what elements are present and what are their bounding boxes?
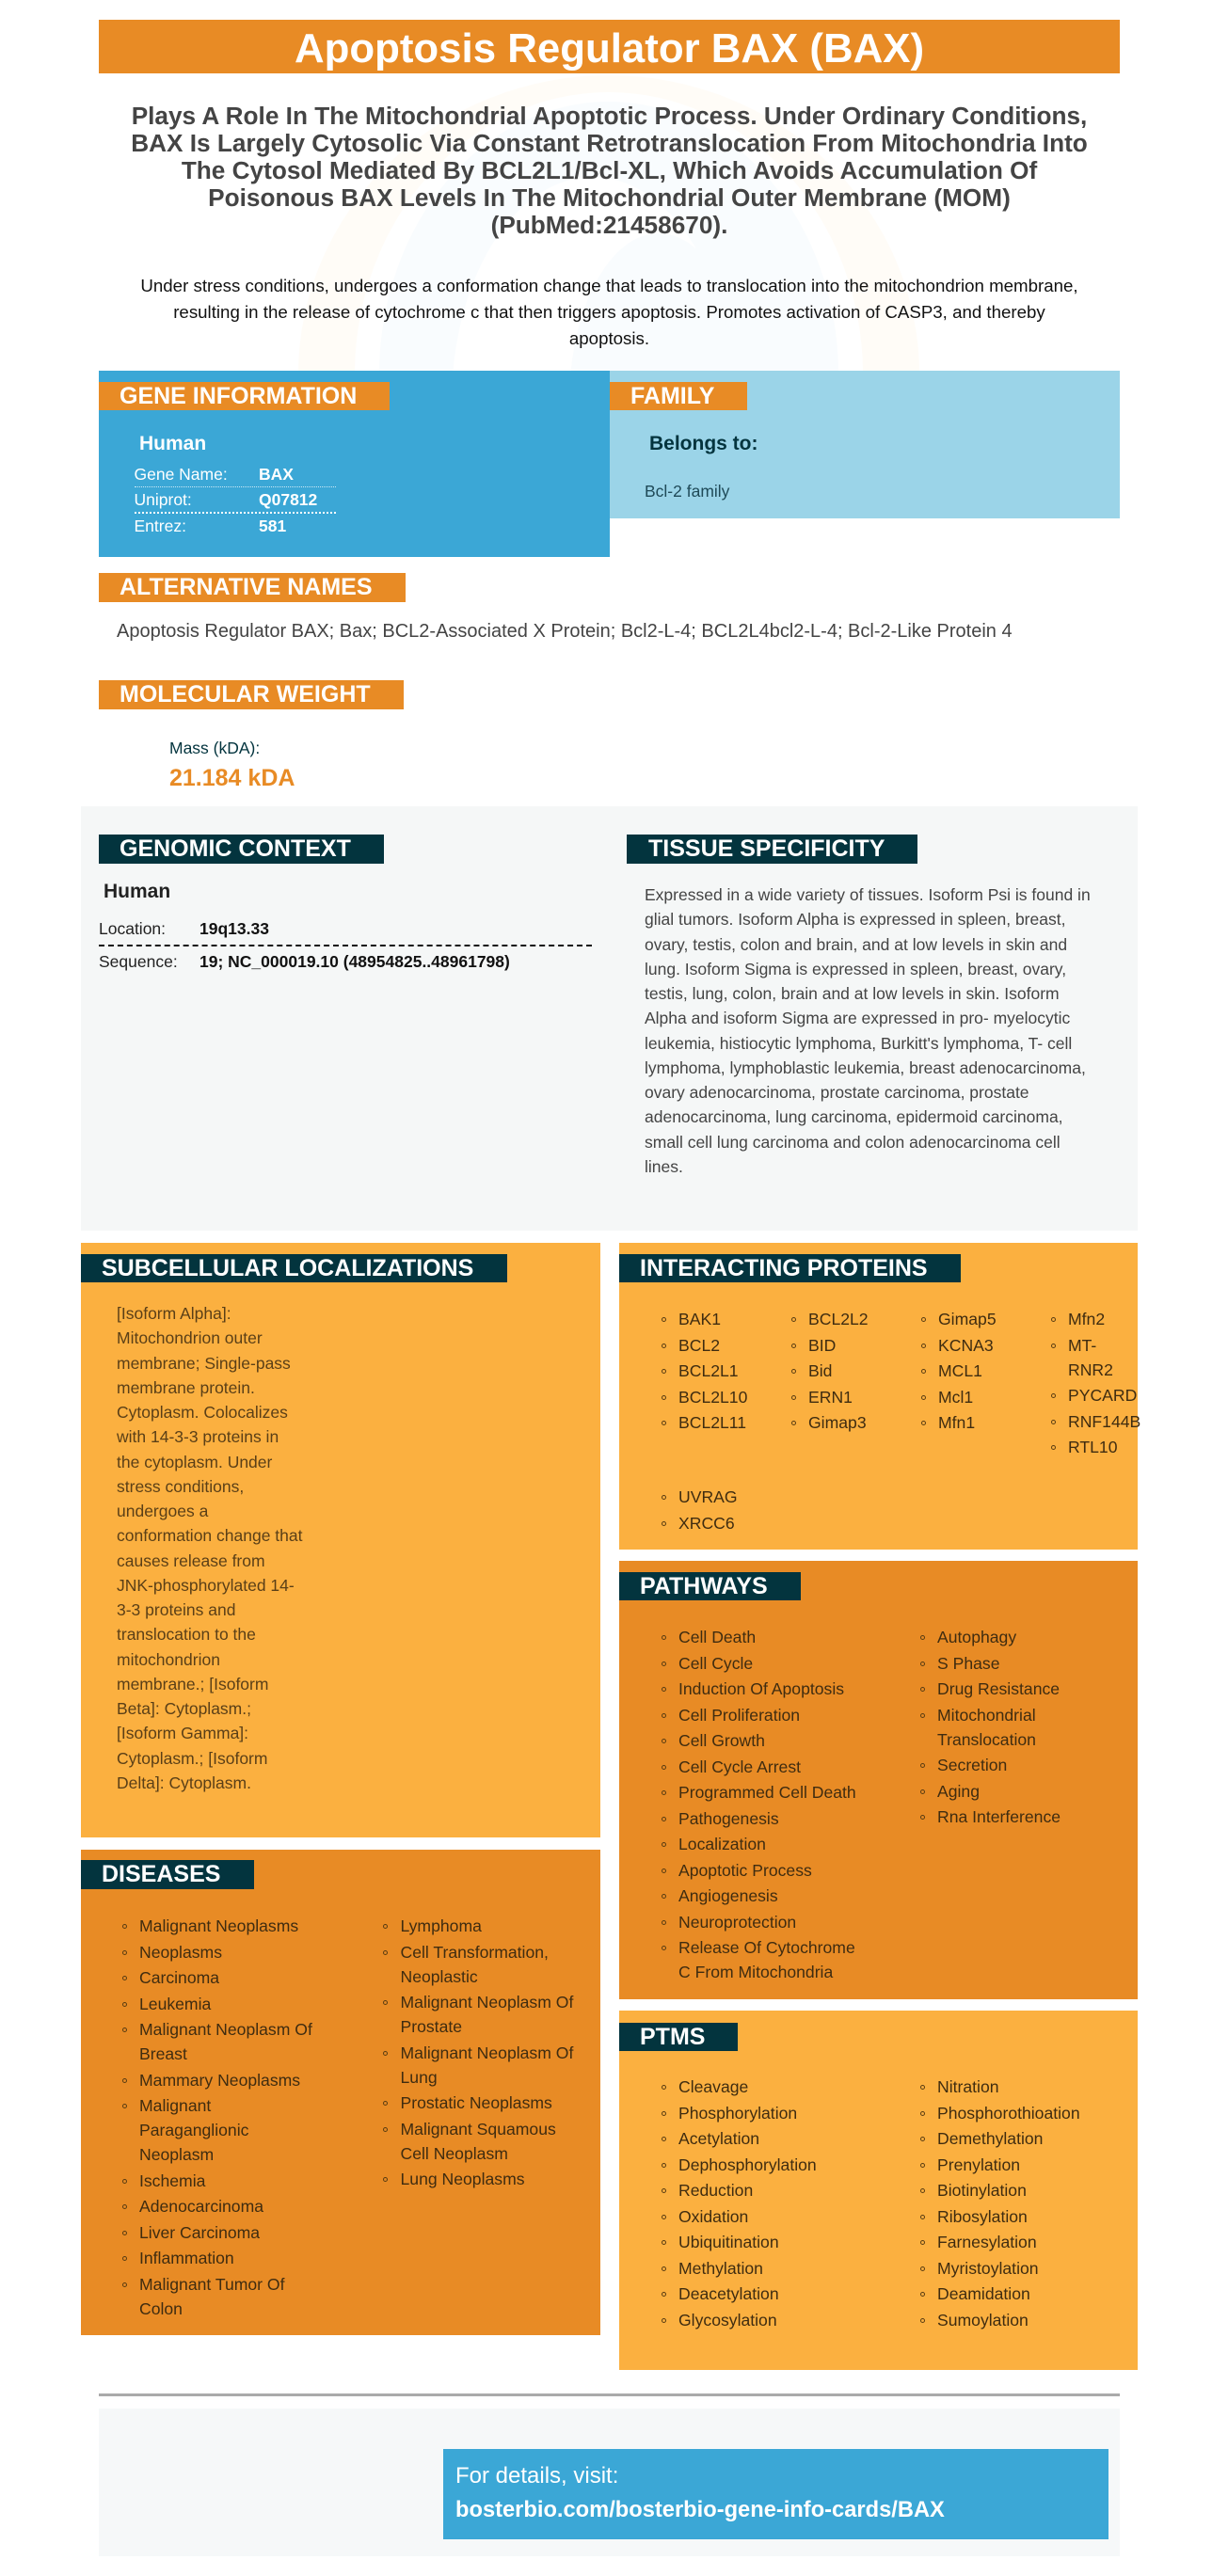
diseases list column 1: Malignant Neoplasms xyxy=(139,1916,298,1935)
heading: subcellular localizations: SUBCELLULAR LOCALIZATIONS xyxy=(102,1255,473,1281)
description xyxy=(140,276,1078,348)
diseases list column 1: Inflammation xyxy=(139,2249,234,2267)
interacting proteins column 4: Mfn2 xyxy=(1068,1310,1105,1328)
tissue specificity text: small cell lung carcinoma and colon adenocarcinoma cell xyxy=(645,1133,1060,1152)
ptms list column 1: Methylation xyxy=(678,2258,763,2277)
diseases list column 2: Prostate xyxy=(401,2017,462,2036)
callout: details link xyxy=(443,2449,1108,2539)
gene info table xyxy=(134,465,336,535)
pathways list column 1: Release Of Cytochrome xyxy=(678,1938,855,1957)
pathways list column 2: Rna Interference xyxy=(937,1807,1060,1826)
subcellular localizations text: the cytoplasm. Under xyxy=(117,1453,272,1471)
mass value: 21.184 kDA xyxy=(169,765,295,791)
alternative names text: Apoptosis Regulator BAX; Bax; BCL2-Associated X Protein; Bcl2-L-4; BCL2L4bcl2-L-4; Bcl-2-Like Protein 4 xyxy=(117,621,1013,642)
pathways list column 1: Apoptotic Process xyxy=(678,1861,812,1880)
details url: bosterbio.com/bosterbio-gene-info-cards/BAX xyxy=(455,2498,945,2522)
interacting proteins column 2: Bid xyxy=(808,1361,832,1380)
ptms list column 2: Sumoylation xyxy=(937,2311,1029,2330)
subcellular localizations text xyxy=(117,1304,303,1792)
gene info table: BAX xyxy=(259,465,294,484)
heading: molecular weight: MOLECULAR WEIGHT xyxy=(120,681,371,708)
pathways list column 1: Cell Growth xyxy=(678,1731,765,1750)
pathways list column 2: Secretion xyxy=(937,1756,1007,1774)
ptms list column 1: Phosphorylation xyxy=(678,2104,797,2123)
subcellular localizations text: stress conditions, xyxy=(117,1477,244,1496)
interacting proteins column 1: BCL2L10 xyxy=(678,1387,747,1406)
subcellular localizations text: with 14-3-3 proteins in xyxy=(117,1427,279,1446)
subtitle: Plays A Role In The Mitochondrial Apoptotic Process. Under Ordinary Conditions, xyxy=(132,102,1087,130)
heading: ptms: PTMS xyxy=(640,2024,705,2050)
diseases list column 2: Malignant Neoplasm Of xyxy=(401,2043,573,2062)
heading: gene information: GENE INFORMATION xyxy=(120,383,357,409)
tissue specificity text: adenocarcinoma, lung carcinoma, epidermoid carcinoma, xyxy=(645,1107,1063,1126)
subcellular localizations text: causes release from xyxy=(117,1550,265,1569)
diseases list column 1: Carcinoma xyxy=(139,1968,219,1987)
heading: diseases: DISEASES xyxy=(102,1861,220,1887)
pathways list column 1: Pathogenesis xyxy=(678,1808,779,1827)
interacting proteins column 1: BCL2 xyxy=(678,1336,720,1355)
gene info table: 581 xyxy=(259,517,286,535)
description: resulting in the release of cytochrome c that then triggers apoptosis. Promotes activation of CASP3, and thereby xyxy=(173,302,1045,322)
interacting proteins column 2: BID xyxy=(808,1336,836,1355)
interacting proteins column 3: Mcl1 xyxy=(938,1387,973,1406)
diseases list column 1: Breast xyxy=(139,2044,187,2063)
diseases list column 1: Ischemia xyxy=(139,2171,205,2190)
genomic table xyxy=(99,919,592,971)
subcellular localizations text: undergoes a xyxy=(117,1502,208,1520)
subtitle: BAX Is Largely Cytosolic Via Constant Retrotranslocation From Mitochondria Into xyxy=(131,128,1088,156)
ptms list column 2: Deamidation xyxy=(937,2284,1030,2303)
diseases list column 1: Neoplasm xyxy=(139,2145,214,2164)
subcellular localizations text: Cytoplasm.; [Isoform xyxy=(117,1748,267,1767)
pathways list column 1: Neuroprotection xyxy=(678,1912,796,1931)
tissue specificity text: ovary adenocarcinoma, prostate carcinoma, prostate xyxy=(645,1083,1029,1102)
heading: interacting proteins: INTERACTING PROTEINS xyxy=(640,1255,928,1281)
gene info table: Uniprot: xyxy=(134,490,192,509)
interacting proteins column 3: Gimap5 xyxy=(938,1310,997,1328)
panel: gene information xyxy=(99,371,610,557)
diseases list column 1: Malignant xyxy=(139,2096,211,2115)
gene info table: Gene Name: xyxy=(134,465,228,484)
ptms list column 2: Nitration xyxy=(937,2077,999,2096)
tissue specificity text: lymphoma, lymphoblastic leukemia, breast adenocarcinoma, xyxy=(645,1058,1086,1077)
interacting proteins column 1: BAK1 xyxy=(678,1310,721,1328)
pathways list column 2: Aging xyxy=(937,1782,980,1801)
diseases list column 2: Cell Transformation, xyxy=(401,1942,549,1961)
tissue specificity text: glial tumors. Isoform Alpha is expressed in spleen, breast, xyxy=(645,910,1065,929)
tissue specificity text: Expressed in a wide variety of tissues. Isoform Psi is found in xyxy=(645,885,1091,904)
diseases list column 2: Neoplastic xyxy=(401,1966,478,1985)
title xyxy=(99,20,1120,73)
pathways list column 1: Cell Death xyxy=(678,1628,756,1646)
subcellular localizations text: conformation change that xyxy=(117,1526,303,1545)
heading: alternative names: ALTERNATIVE NAMES xyxy=(120,574,373,600)
diseases list column 1: Malignant Tumor Of xyxy=(139,2275,284,2294)
diseases list column 1: Mammary Neoplasms xyxy=(139,2070,300,2089)
genomic table: 19; NC_000019.10 (48954825..48961798) xyxy=(199,952,510,971)
subcellular localizations text: translocation to the xyxy=(117,1625,256,1644)
ptms list column 1: Deacetylation xyxy=(678,2284,779,2303)
ptms list column 2: Biotinylation xyxy=(937,2181,1027,2200)
panel: footer xyxy=(99,2409,1120,2556)
panel: diseases xyxy=(81,1850,600,2335)
diseases list column 1 xyxy=(122,1916,312,2318)
title: Apoptosis Regulator BAX (BAX) xyxy=(295,25,924,72)
diseases list column 1: Neoplasms xyxy=(139,1942,222,1961)
details label: For details, visit: xyxy=(455,2463,618,2489)
species label: Human xyxy=(104,881,170,902)
mass label: Mass (kDA): xyxy=(169,739,260,757)
panel: pathways xyxy=(619,1561,1138,1999)
interacting proteins column 4: RNF144B xyxy=(1068,1411,1140,1430)
pathways list column 1: Programmed Cell Death xyxy=(678,1783,856,1802)
subtitle xyxy=(131,102,1088,239)
gene info table: Q07812 xyxy=(259,490,317,509)
interacting proteins column 1: BCL2L11 xyxy=(678,1413,746,1432)
pathways list column 1 xyxy=(662,1628,856,1981)
interacting proteins second row xyxy=(662,1487,738,1532)
pathways list column 2: Autophagy xyxy=(937,1628,1016,1646)
diseases list column 1: Liver Carcinoma xyxy=(139,2222,260,2241)
interacting proteins column 4: RTL10 xyxy=(1068,1438,1118,1456)
pathways list column 1: Cell Cycle Arrest xyxy=(678,1757,801,1776)
subcellular localizations text: 3-3 proteins and xyxy=(117,1600,235,1619)
panel: family xyxy=(610,371,1120,518)
interacting proteins column 3: Mfn1 xyxy=(938,1413,975,1432)
ptms list column 2 xyxy=(920,2077,1080,2330)
gene info table: Entrez: xyxy=(134,517,186,535)
subcellular localizations text: JNK-phosphorylated 14- xyxy=(117,1576,295,1595)
interacting proteins column 2 xyxy=(791,1310,869,1432)
ptms list column 1: Glycosylation xyxy=(678,2311,777,2330)
subcellular localizations text: [Isoform Gamma]: xyxy=(117,1724,248,1742)
heading: pathways xyxy=(619,1572,801,1600)
tissue specificity text: ovary, testis, colon and brain, and at low levels in skin and xyxy=(645,935,1067,954)
pathways list column 2: S Phase xyxy=(937,1654,1000,1673)
interacting proteins column 2: ERN1 xyxy=(808,1387,853,1406)
pathways list column 1: C From Mitochondria xyxy=(678,1963,833,1981)
diseases list column 2: Malignant Squamous xyxy=(401,2119,556,2138)
interacting proteins second row: UVRAG xyxy=(678,1487,738,1506)
interacting proteins column 4 xyxy=(1051,1310,1140,1456)
diseases list column 2: Lung xyxy=(401,2068,438,2087)
subcellular localizations text: mitochondrion xyxy=(117,1650,220,1669)
diseases list column 1: Colon xyxy=(139,2299,183,2318)
heading: family: FAMILY xyxy=(630,383,714,409)
genomic table: 19q13.33 xyxy=(199,919,269,938)
pathways list column 1: Cell Proliferation xyxy=(678,1705,800,1724)
interacting proteins column 4: MT- xyxy=(1068,1336,1096,1355)
ptms list column 2: Farnesylation xyxy=(937,2233,1037,2251)
ptms list column 1: Reduction xyxy=(678,2181,753,2200)
ptms list column 2: Phosphorothioation xyxy=(937,2104,1080,2123)
ptms list column 2: Prenylation xyxy=(937,2155,1020,2173)
tissue specificity text: lines. xyxy=(645,1157,683,1176)
ptms list column 1: Acetylation xyxy=(678,2129,759,2148)
belongs to label: Belongs to: xyxy=(649,433,758,454)
tissue specificity text xyxy=(645,885,1091,1176)
interacting proteins column 4: RNR2 xyxy=(1068,1360,1113,1379)
diseases list column 2: Lymphoma xyxy=(401,1916,482,1935)
tissue specificity text: testis, lung, colon, brain and at low levels in skin. Isoform xyxy=(645,984,1060,1003)
tissue specificity text: leukemia, histiocytic lymphoma, Burkitt's lymphoma, T- cell xyxy=(645,1033,1072,1052)
interacting proteins column 1 xyxy=(662,1310,747,1432)
ptms list column 2: Ribosylation xyxy=(937,2207,1028,2226)
interacting proteins second row: XRCC6 xyxy=(678,1513,735,1532)
interacting proteins column 4: PYCARD xyxy=(1068,1386,1137,1405)
interacting proteins column 3: MCL1 xyxy=(938,1361,982,1380)
diseases list column 1: Malignant Neoplasm Of xyxy=(139,2020,312,2039)
subcellular localizations text: [Isoform Alpha]: xyxy=(117,1304,231,1323)
subcellular localizations text: membrane; Single-pass xyxy=(117,1353,291,1372)
ptms list column 1: Ubiquitination xyxy=(678,2233,779,2251)
heading: diseases xyxy=(81,1860,254,1889)
pathways list column 2: Mitochondrial xyxy=(937,1705,1036,1724)
subcellular localizations text: Delta]: Cytoplasm. xyxy=(117,1773,251,1792)
diseases list column 2: Prostatic Neoplasms xyxy=(401,2093,552,2112)
ptms list column 1: Oxidation xyxy=(678,2207,748,2226)
heading: tissue specificity: TISSUE SPECIFICITY xyxy=(648,835,885,862)
watermark logo xyxy=(282,73,941,374)
heading: family xyxy=(610,382,747,410)
genomic table: Location: xyxy=(99,919,166,938)
ptms list column 2: Demethylation xyxy=(937,2129,1043,2148)
pathways list column 2: Translocation xyxy=(937,1729,1036,1748)
pathways list column 2 xyxy=(920,1628,1060,1826)
interacting proteins column 2: BCL2L2 xyxy=(808,1310,869,1328)
interacting proteins column 3: KCNA3 xyxy=(938,1336,994,1355)
genomic table: Sequence: xyxy=(99,952,178,971)
pathways list column 1: Localization xyxy=(678,1835,766,1853)
diseases list column 2: Lung Neoplasms xyxy=(401,2170,525,2188)
species label: Human xyxy=(139,433,206,454)
description: apoptosis. xyxy=(569,328,649,348)
subtitle: Poisonous BAX Levels In The Mitochondrial Outer Membrane (MOM) xyxy=(208,183,1011,211)
diseases list column 2: Malignant Neoplasm Of xyxy=(401,1993,573,2012)
interacting proteins column 3 xyxy=(921,1310,997,1432)
subtitle: The Cytosol Mediated By BCL2L1/Bcl-XL, Which Avoids Accumulation Of xyxy=(182,156,1037,184)
pathways list column 1: Cell Cycle xyxy=(678,1654,753,1673)
diseases list column 1: Paraganglionic xyxy=(139,2121,248,2139)
ptms list column 1 xyxy=(662,2077,817,2330)
panel: interacting proteins xyxy=(619,1243,1138,1550)
diseases list column 2 xyxy=(383,1916,574,2188)
subcellular localizations text: Cytoplasm. Colocalizes xyxy=(117,1403,288,1422)
heading: pathways: PATHWAYS xyxy=(640,1573,768,1599)
diseases list column 1: Adenocarcinoma xyxy=(139,2197,263,2216)
subcellular localizations text: membrane.; [Isoform xyxy=(117,1675,268,1693)
ptms list column 1: Cleavage xyxy=(678,2077,748,2096)
ptms list column 1: Dephosphorylation xyxy=(678,2155,817,2173)
interacting proteins column 1: BCL2L1 xyxy=(678,1361,739,1380)
panel: subcellular localizations xyxy=(81,1243,600,1837)
panel: genomic context and tissue specificity xyxy=(81,806,1138,1231)
panel: ptms xyxy=(619,2011,1138,2370)
tissue specificity text: Alpha and isoform Sigma are expressed in pro- myelocytic xyxy=(645,1009,1070,1027)
subcellular localizations text: Mitochondrion outer xyxy=(117,1328,263,1347)
description: Under stress conditions, undergoes a conformation change that leads to translocation into the mitochondrion membrane, xyxy=(140,276,1078,295)
pathways list column 1: Induction Of Apoptosis xyxy=(678,1679,844,1698)
diseases list column 1: Leukemia xyxy=(139,1995,211,2013)
diseases list column 2: Cell Neoplasm xyxy=(401,2143,508,2162)
heading: ptms xyxy=(619,2023,738,2051)
ptms list column 2: Myristoylation xyxy=(937,2258,1039,2277)
subcellular localizations text: Beta]: Cytoplasm.; xyxy=(117,1699,251,1718)
tissue specificity text: lung. Isoform Sigma is expressed in spleen, breast, ovary, xyxy=(645,960,1066,978)
subtitle: (PubMed:21458670). xyxy=(491,211,727,239)
pathways list column 1: Angiogenesis xyxy=(678,1886,778,1905)
heading: genomic context: GENOMIC CONTEXT xyxy=(120,835,351,862)
interacting proteins column 2: Gimap3 xyxy=(808,1413,867,1432)
family value: Bcl-2 family xyxy=(645,482,729,501)
subcellular localizations text: membrane protein. xyxy=(117,1378,255,1397)
pathways list column 2: Drug Resistance xyxy=(937,1679,1060,1698)
